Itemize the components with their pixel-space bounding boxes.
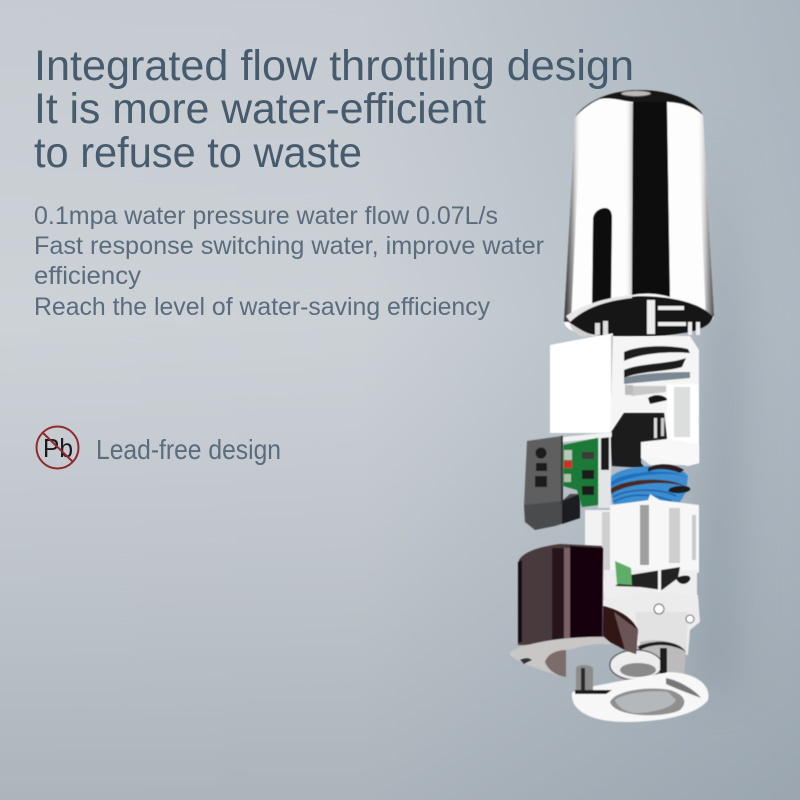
sensor module [524, 432, 612, 530]
description text block: Fast response switching water, improve water [34, 232, 544, 260]
description text block [34, 202, 544, 321]
middle housing [585, 494, 699, 600]
description text block: Reach the level of water-saving efficiency [34, 293, 490, 321]
description text block: 0.1mpa water pressure water flow 0.07L/s [34, 202, 498, 230]
title: It is more water-efficient [34, 85, 486, 133]
title: to refuse to waste [34, 129, 362, 177]
upper housing [550, 333, 699, 465]
title: Integrated flow throttling design [34, 42, 634, 90]
brown cover [510, 544, 638, 677]
blue seal [608, 464, 690, 506]
lead-free label: Lead-free design [96, 434, 281, 465]
icon: lead-free Pb [36, 426, 78, 468]
mounting ring [572, 665, 709, 722]
title [34, 42, 634, 177]
lower housing [603, 592, 700, 680]
description text block: efficiency [34, 262, 142, 290]
icon: lead-free Pb: Pb [43, 433, 73, 463]
product shadow [700, 120, 738, 690]
circuit board [563, 438, 598, 507]
motor [610, 413, 699, 468]
chrome cap [564, 90, 714, 338]
product: exploded faucet sensor [510, 90, 738, 722]
